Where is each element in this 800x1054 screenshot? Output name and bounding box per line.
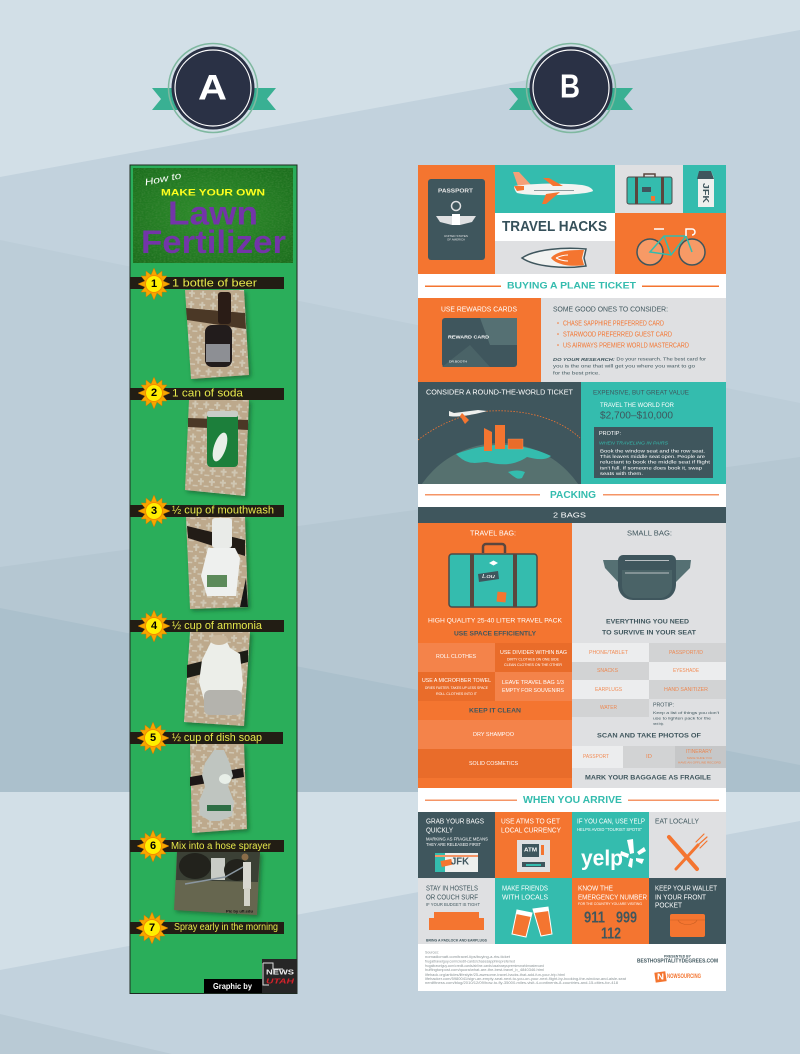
step 5 band — [130, 722, 283, 754]
photo: bottle of beer — [185, 290, 249, 379]
step 5 band: 5 — [150, 732, 156, 744]
photo: can of soda — [185, 400, 249, 496]
tile: wallet — [649, 878, 726, 944]
panel A header: grass title: Fertilizer — [141, 224, 286, 260]
panel: small bag — [572, 523, 726, 788]
icon: surfboard — [522, 248, 586, 267]
documents row: HAVE AN OFFLINE RECORD — [678, 760, 722, 764]
panel: small bag: TO SURVIVE IN YOUR SEAT — [602, 630, 697, 636]
subheading: scan and take photos: SCAN AND TAKE PHOTOS OF — [597, 732, 701, 740]
footer: presented by: N — [657, 972, 664, 982]
panel B: travel hacks — [405, 165, 726, 991]
step 7 band: Spray early in the morning — [174, 922, 278, 933]
tile: grab your bags: MARKING AS FRAGILE MEANS — [426, 836, 488, 842]
bar: 2 bags — [418, 507, 726, 523]
panel: use rewards cards — [418, 298, 541, 382]
cell: solid cosmetics — [418, 749, 572, 778]
step 7 band — [130, 912, 284, 944]
documents row — [572, 746, 726, 768]
tile: wallet: POCKET — [655, 900, 683, 910]
cell: dry shampoo — [418, 720, 572, 749]
cell: leave bag empty — [495, 672, 572, 701]
icon: crossed fork and knife — [669, 834, 707, 869]
tile: wallet: IN YOUR FRONT — [655, 892, 707, 902]
step 3 band: ½ cup of mouthwash — [172, 504, 274, 516]
tile: use ATMs: USE ATMS TO GET — [501, 816, 561, 826]
cell: microfiber towel — [418, 672, 495, 701]
callout: protip pairs: WHEN TRAVELING IN PAIRS — [599, 440, 668, 446]
footer: presented by: BESTHOSPITALITYDEGREES.COM — [637, 958, 718, 964]
badge B: B — [560, 68, 580, 104]
bar: 2 bags: 2 BAGS — [553, 510, 586, 520]
tile: hostels: BRING A PADLOCK AND EARPLUGS — [426, 938, 487, 942]
panel: expensive but great value — [581, 382, 726, 484]
footer: sources — [425, 950, 626, 985]
callout: protip list: use to lighten pack for the — [653, 716, 712, 720]
icon: large suitcase: Lou — [482, 574, 495, 580]
photo: hose sprayer with credit — [174, 852, 260, 915]
footer: sources: Sources: — [425, 950, 439, 954]
subheading: mark baggage: MARK YOUR BAGGAGE AS FRAGILE — [585, 774, 711, 782]
callout: protip pairs: PROTIP: — [599, 431, 621, 437]
panel: good cards to consider: DO YOUR RESEARCH: Do your research. The best card for — [553, 356, 707, 362]
cell: microfiber towel: DRIES FASTER. TAKES UP LESS SPACE — [425, 686, 488, 690]
documents row: ITINERARY — [686, 749, 713, 755]
cell: use divider: USE DIVIDER WITHIN BAG — [500, 650, 567, 656]
checklist: items to carry: PHONE/TABLET — [589, 650, 628, 656]
panel: small bag: EVERYTHING YOU NEED — [606, 618, 689, 626]
panel: expensive but great value: EXPENSIVE, BUT GREAT VALUE — [593, 390, 690, 396]
panel: round-the-world ticket: CONSIDER A ROUND-THE-WORLD TICKET — [426, 388, 573, 396]
credit: graphic by news utah — [204, 959, 297, 993]
footer: sources: frugaltravelguy.com/credit-cards/chasesapphirepreferred — [425, 960, 515, 964]
cell: dry shampoo: DRY SHAMPOO — [473, 732, 514, 738]
tile: wallet: KEEP YOUR WALLET — [655, 884, 718, 892]
footer: sources: lifehack.org/articles/lifestyle/25-awesome-travel-hacks-that-add-fun-your-trip.html — [425, 973, 565, 977]
icon: JFK luggage tag: JFK — [701, 183, 711, 204]
tile: hostels — [418, 878, 495, 944]
tile: hostels: OR COUCH SURF — [426, 892, 479, 902]
credit: graphic by news utah: NEWS — [266, 970, 294, 976]
step 4 band: ½ cup of ammonia — [172, 620, 263, 632]
icon: sofa — [429, 912, 484, 930]
icon: reward card: DR.BOOTH — [449, 360, 467, 364]
icon: suitcase small — [627, 174, 672, 204]
step 1 band: 1 bottle of beer — [172, 278, 257, 290]
subheading: keep it clean: KEEP IT CLEAN — [469, 708, 521, 714]
step 3 band: 3 — [151, 505, 157, 517]
tile: eat locally — [649, 812, 726, 878]
callout: protip pairs: isn't full. If someone does book it, swap — [600, 466, 703, 470]
footer: presented by — [637, 954, 718, 983]
credit: graphic by news utah: UTAH — [266, 976, 295, 986]
documents row: PASSPORT — [583, 754, 609, 760]
tile: grab your bags: QUICKLY — [426, 826, 453, 834]
icon: reward card — [442, 318, 517, 367]
checklist: items to carry: EARPLUGS — [595, 687, 623, 693]
panel: round-the-world ticket — [418, 382, 581, 484]
tile: emergency number: FOR THE COUNTRY YOU ARE VISITING — [578, 902, 642, 906]
photo: mouthwash — [186, 517, 248, 609]
footer: sources: nomadicmatt.com/travel-tips/buying-a-rtw-ticket — [425, 955, 510, 959]
step 7 band: 7 — [149, 922, 155, 934]
checklist: items to carry — [572, 643, 726, 717]
callout: protip pairs: reluctant to book the middle seat if flight — [600, 460, 711, 464]
cell: roll clothes — [418, 643, 495, 672]
cell: use divider: CLEAN CLOTHES ON THE OTHER — [504, 663, 563, 667]
tile: use ATMs: LOCAL CURRENCY — [501, 826, 561, 834]
icon: airplane — [513, 172, 593, 204]
step 2 band: 1 can of soda — [172, 388, 244, 400]
step 4 band: 4 — [151, 620, 158, 632]
footer: sources: nerdfitness.com/blog/2010/12/09/how-to-fly-35000-miles-visit-4-continents-8-countries-and-15-cities-for-418 — [425, 981, 618, 985]
icon: passport: UNITED STATES — [444, 234, 468, 238]
photo: hose sprayer with credit: Pic by ufl.edu — [226, 908, 254, 914]
icon: passport: OF AMERICA — [447, 238, 465, 242]
panel: good cards to consider: SOME GOOD ONES TO CONSIDER: — [553, 304, 668, 314]
tile: use yelp — [572, 812, 649, 878]
tile: use ATMs — [495, 812, 572, 878]
icon: yelp logo: yelp — [581, 846, 623, 870]
step 6 band: 6 — [150, 840, 156, 852]
credit: graphic by news utah: Graphic by — [213, 982, 253, 991]
step 5 band: ½ cup of dish soap — [172, 732, 262, 744]
panel: expensive but great value: TRAVEL THE WORLD FOR — [600, 403, 675, 409]
callout: protip pairs: Book the window seat and the row seat. — [600, 448, 705, 454]
cell: leave bag empty: LEAVE TRAVEL BAG 1/3 — [502, 680, 564, 686]
icon: bicycle — [637, 229, 705, 265]
tile: make friends: MAKE FRIENDS — [502, 884, 548, 892]
checklist: items to carry: HAND SANITIZER — [664, 687, 708, 693]
photo: ammonia — [184, 632, 250, 726]
cell: microfiber towel: ROLL CLOTHES INTO IT — [436, 692, 477, 696]
tile: emergency number: 112 — [601, 926, 621, 942]
panel: expensive but great value: $2,700–$10,000 — [600, 410, 673, 422]
tile: make friends — [495, 878, 572, 944]
panel A header: grass title — [133, 168, 293, 263]
heading: buying a plane ticket: BUYING A PLANE TICKET — [507, 280, 636, 292]
step 6 band — [130, 830, 284, 862]
icon: passport — [428, 179, 485, 260]
checklist: items to carry: SNACKS — [597, 668, 619, 674]
tile: hostels: STAY IN HOSTELS — [426, 884, 478, 892]
callout: protip pairs: This leaves middle seat open. People are — [600, 454, 706, 459]
footer: sources: huffingtonpost.com/quora/what-are-the-best-travel_b_4840346.html — [425, 968, 544, 972]
title: travel hacks: TRAVEL HACKS — [502, 219, 607, 235]
tile: use yelp: HELPS AVOID "TOURIST SPOTS" — [577, 827, 642, 832]
callout: protip list: PROTIP: — [653, 702, 674, 708]
icon: wallet — [670, 914, 705, 937]
panel A: lawn fertilizer — [130, 165, 297, 994]
callout: protip list: next trip. — [653, 721, 664, 726]
panel: good cards to consider: STARWOOD PREFERRED GUEST CARD — [563, 330, 672, 338]
cell: use divider: DIRTY CLOTHES ON ONE SIDE — [507, 658, 559, 662]
heading: packing: PACKING — [550, 489, 596, 501]
tile: emergency number: EMERGENCY NUMBER — [578, 892, 647, 902]
callout: protip list — [653, 702, 720, 726]
documents row: ID — [646, 754, 652, 760]
step 2 band: 2 — [151, 387, 157, 399]
panel: good cards to consider — [541, 298, 726, 382]
panel: use rewards cards: USE REWARDS CARDS — [441, 304, 517, 314]
checklist: items to carry: WATER — [600, 705, 617, 711]
panel: travel bag: USE SPACE EFFICIENTLY — [454, 630, 536, 638]
footer: presented by: PRESENTED BY — [664, 954, 691, 958]
tile: grab your bags — [418, 812, 495, 878]
tile: emergency number: 999 — [616, 910, 637, 926]
cell: solid cosmetics: SOLID COSMETICS — [469, 761, 519, 767]
step 1 band: 1 — [151, 278, 157, 290]
illustration: globe with city and plane — [418, 410, 580, 484]
panel A header: grass title: Lawn — [168, 194, 258, 232]
documents row: MAKE SURE YOU — [687, 756, 712, 760]
heading: when you arrive: WHEN YOU ARRIVE — [523, 794, 622, 806]
icon: reward card: REWARD CARD — [448, 334, 490, 340]
cell: microfiber towel: USE A MICROFIBER TOWEL — [422, 678, 491, 684]
tile: emergency number: KNOW THE — [578, 884, 613, 892]
icon: passport: PASSPORT — [438, 188, 474, 194]
tile: hostels: IF YOUR BUDGET IS TIGHT — [426, 902, 480, 907]
panel: travel bag — [418, 523, 572, 788]
tile: make friends: WITH LOCALS — [502, 892, 548, 902]
callout: protip list: Keep a list of things you don't — [653, 710, 720, 715]
tile: emergency number — [572, 878, 649, 944]
panel: travel bag: HIGH QUALITY 25-40 LITER TRAVEL PACK — [428, 618, 562, 624]
icon: fanny pack — [603, 555, 691, 600]
cell: leave bag empty: EMPTY FOR SOUVENIRS — [502, 688, 565, 694]
header mosaic — [418, 165, 726, 274]
photo: dish soap — [190, 744, 247, 833]
icon: large suitcase — [449, 544, 537, 607]
tile: grab your bags: GRAB YOUR BAGS — [426, 816, 484, 826]
panel A header: grass title: How to — [144, 171, 182, 188]
panel: travel bag: TRAVEL BAG: — [470, 528, 516, 538]
icon: JFK luggage tag — [697, 171, 714, 207]
panel: small bag: SMALL BAG: — [627, 528, 672, 538]
panel: good cards to consider: CHASE SAPPHIRE PREFERRED CARD — [563, 318, 664, 328]
tile: eat locally: EAT LOCALLY — [655, 816, 699, 826]
callout: protip pairs: seats with them. — [600, 471, 643, 476]
step 4 band — [130, 610, 284, 642]
panel A header: grass title: MAKE YOUR OWN — [161, 188, 265, 198]
badge B — [509, 44, 633, 132]
step 6 band: Mix into a hose sprayer — [171, 841, 272, 852]
footer: sources: lifehacker.com/5980041/sign-an-empty-seat-next-to-you-on-your-next-flight-by-booking-the-window-and-aisle-seat — [425, 977, 626, 981]
icon: ATM: ATM — [524, 848, 537, 854]
tile: emergency number: 911 — [584, 910, 605, 926]
cell: roll clothes: ROLL CLOTHES — [436, 654, 477, 660]
footer: presented by: NOWSOURCING — [667, 974, 701, 980]
tile: use yelp: IF YOU CAN, USE YELP — [577, 816, 645, 826]
step 1 band — [130, 268, 284, 300]
checklist: items to carry: EYESHADE — [673, 668, 700, 674]
callout: protip pairs — [594, 427, 713, 478]
icon: JFK bag tag: JFK — [451, 856, 470, 868]
panel: good cards to consider: for the best price. — [553, 370, 600, 376]
icon: clinking beers — [512, 907, 552, 937]
panel: good cards to consider: you is the one that will get you where you want to go — [553, 364, 696, 368]
checklist: items to carry: PASSPORT/ID — [669, 650, 703, 656]
step 3 band — [130, 495, 284, 527]
step 2 band — [130, 377, 284, 409]
badge A — [152, 44, 276, 132]
cell: use divider — [495, 643, 572, 672]
panel: good cards to consider: US AIRWAYS PREMIER WORLD MASTERCARD — [563, 340, 689, 350]
footer: sources: frugaltravelguy.com/credit-cards/airline-cards/usairwayspremierworldmastercard — [425, 964, 544, 968]
badge A: A — [198, 68, 227, 108]
tile: grab your bags: THEY ARE RELEASED FIRST — [426, 842, 481, 847]
